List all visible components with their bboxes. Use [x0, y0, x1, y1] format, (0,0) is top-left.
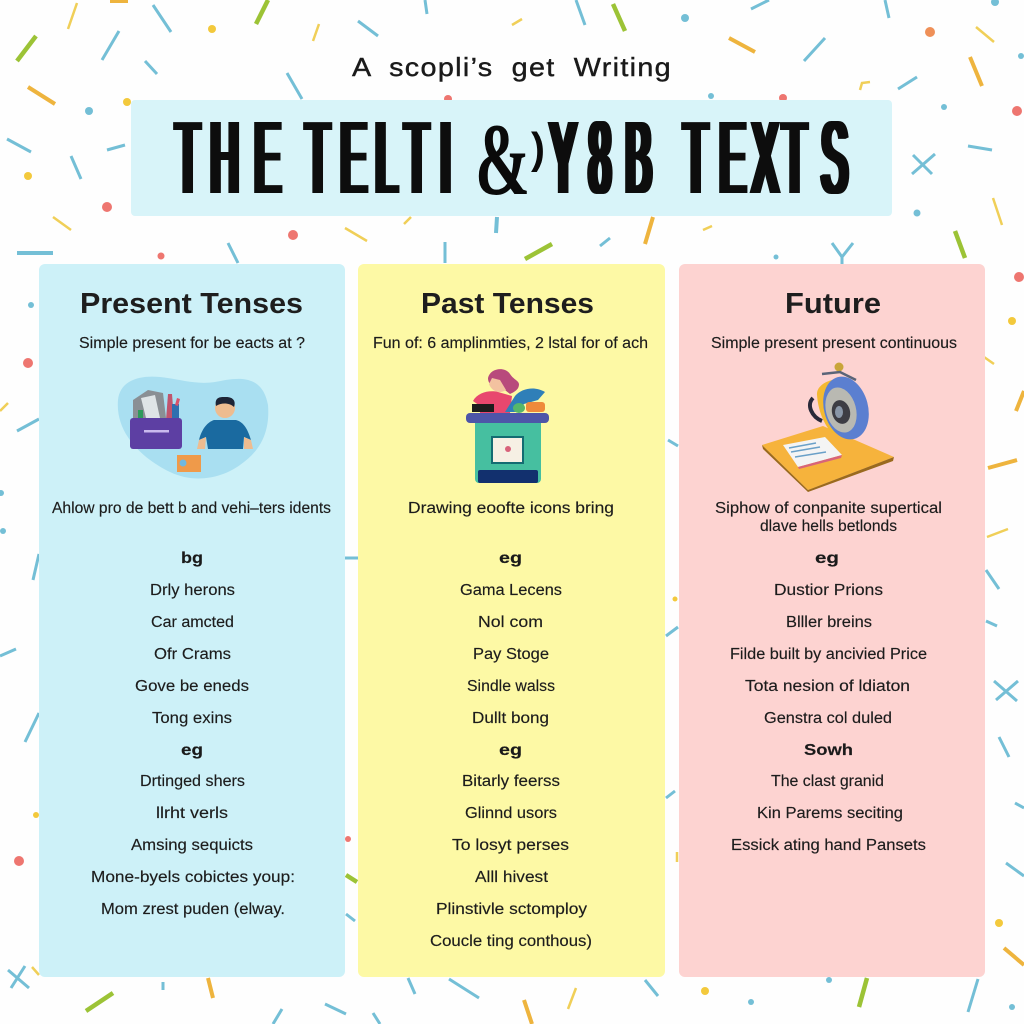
description [715, 500, 942, 535]
list two: Alll hivest [475, 869, 549, 886]
list one: Tota nesion of ldiaton [745, 678, 910, 695]
icon: desk organizer and person [118, 377, 268, 478]
list two: Kin Parems seciting [757, 805, 903, 822]
subtitle: A scopli’s get Writing [352, 52, 672, 82]
list one: Nol com [478, 614, 543, 631]
title banner [131, 99, 892, 217]
heading: present tenses: Present Tenses [80, 288, 303, 320]
title text: TELTI [306, 99, 451, 215]
list two: To losyt perses [452, 837, 569, 854]
list two: Mone-byels cobictes youp: [91, 869, 295, 886]
list two: Plinstivle sctomploy [436, 901, 587, 918]
list one: Gama Lecens [460, 582, 562, 599]
intro text: Simple present present continuous [711, 335, 957, 352]
list one: Sindle walss [467, 678, 555, 695]
heading: future: Future [785, 288, 881, 320]
list two [731, 742, 926, 854]
panel: present tenses [39, 264, 345, 977]
list one: bg [181, 550, 203, 567]
list one: Drly herons [150, 582, 235, 599]
list two: Drtinged shers [140, 773, 245, 790]
list one [135, 550, 249, 727]
title text [176, 99, 848, 217]
list one: eg [499, 550, 522, 567]
list one: Gove be eneds [135, 678, 249, 695]
list one: Filde built by ancivied Price [730, 646, 927, 663]
list two [430, 742, 592, 950]
list one: Tong exins [152, 710, 232, 727]
list one [730, 550, 927, 727]
list one: Car amcted [151, 614, 234, 631]
title text: TEXTS [684, 99, 848, 215]
list two: Glinnd usors [465, 805, 557, 822]
list two: Coucle ting conthous) [430, 933, 592, 950]
title text: THE [176, 99, 281, 215]
list two: Amsing sequicts [131, 837, 253, 854]
panel: future [679, 264, 985, 977]
icon: tape measure on book pad [762, 362, 894, 492]
list two: llrht verls [156, 805, 228, 822]
intro text: Simple present for be eacts at ? [79, 335, 305, 352]
list two [91, 742, 295, 918]
description: Ahlow pro de bett b and vehi–ters idents [52, 500, 331, 517]
panel: past tenses [358, 264, 665, 977]
list two: Essick ating hand Pansets [731, 837, 926, 854]
list one: Pay Stoge [473, 646, 549, 663]
description: dlave hells betlonds [760, 518, 897, 535]
list one: Ofr Crams [154, 646, 231, 663]
list two: Bitarly feerss [462, 773, 560, 790]
list one: Dustior Prions [774, 582, 883, 599]
list one: Dullt bong [472, 710, 549, 727]
title text: ) [531, 124, 545, 173]
icon: person at bin [466, 369, 549, 483]
heading: past tenses: Past Tenses [421, 288, 594, 320]
list one [460, 550, 562, 727]
list two: eg [181, 742, 203, 759]
description: Drawing eoofte icons bring [408, 500, 614, 517]
list one: Genstra col duled [764, 710, 892, 727]
list one: eg [815, 550, 839, 567]
list two: Mom zrest puden (elway. [101, 901, 285, 918]
title text: Y8B [550, 99, 652, 215]
list two: Sowh [804, 742, 853, 759]
intro text: Fun of: 6 amplinmties, 2 lstal for of ach [373, 335, 648, 352]
list one: Blller breins [786, 614, 872, 631]
list two: eg [499, 742, 522, 759]
title text: & [475, 103, 530, 217]
description: Siphow of conpanite supertical [715, 500, 942, 517]
list two: The clast granid [771, 773, 884, 790]
